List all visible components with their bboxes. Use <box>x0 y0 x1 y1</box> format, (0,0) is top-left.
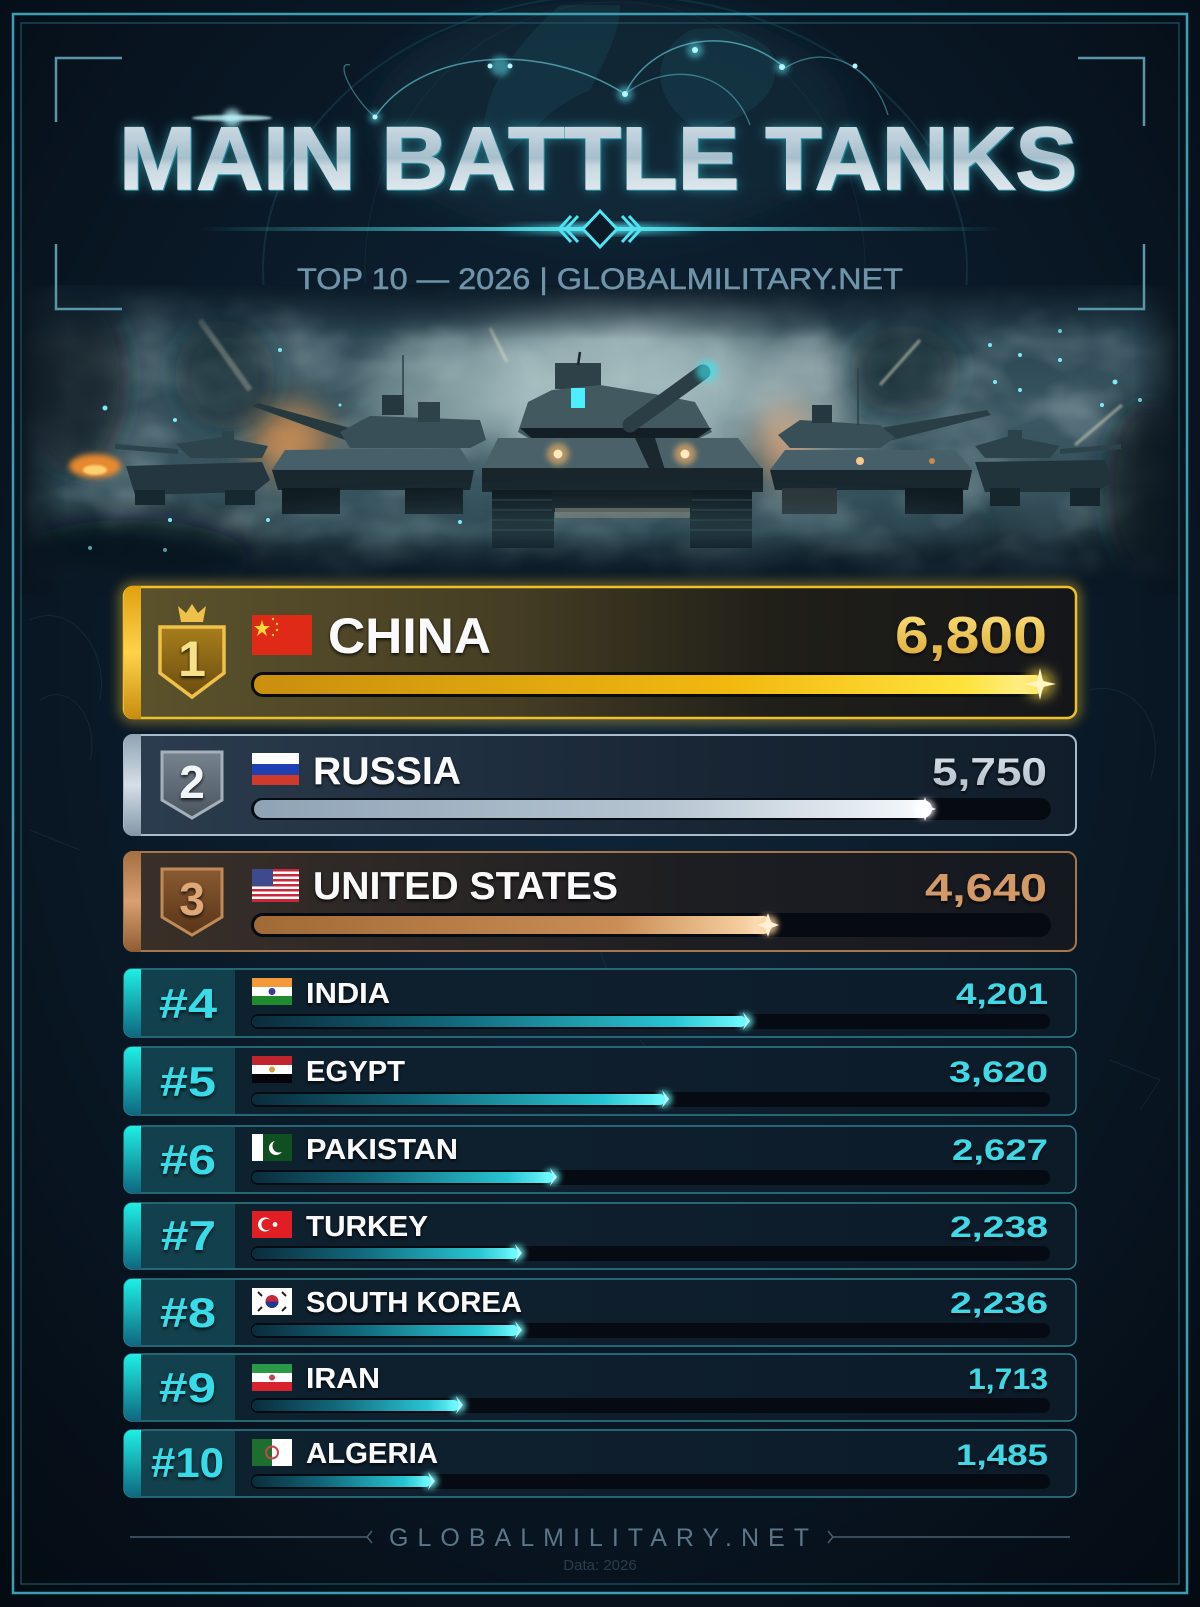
panel: rank 4 India: #4 <box>159 980 218 1027</box>
center tank <box>482 352 763 548</box>
panel: rank 3 United States: 4,640 <box>925 867 1047 910</box>
icon: flag South Korea <box>252 1288 292 1315</box>
panel: rank 1 China <box>124 586 1076 719</box>
icon: flag Russia <box>252 753 299 785</box>
panel: rank 8 South Korea: SOUTH KOREA <box>306 1287 522 1319</box>
footer brand line: GLOBALMILITARY.NET <box>389 1524 809 1552</box>
scene edge fades <box>22 285 1178 595</box>
icon: shield 3: 3 <box>179 873 205 925</box>
icon: shield 3 <box>162 869 222 935</box>
title: MAIN BATTLE TANKS <box>119 108 1077 208</box>
icon: flag Pakistan <box>252 1134 292 1161</box>
faint background map contours <box>30 615 1160 1110</box>
footer brand line <box>130 1524 1070 1552</box>
icon: flag China <box>252 615 312 655</box>
bar chart: United States 4,640 <box>251 913 1051 937</box>
panel: rank 7 Turkey: 2,238 <box>950 1211 1048 1244</box>
title divider with diamond <box>199 211 1002 247</box>
bar chart: Algeria 1,485 <box>251 1472 1050 1490</box>
panel: rank 8 South Korea <box>124 1279 1076 1346</box>
panel: rank 5 Egypt: EGYPT <box>306 1056 405 1088</box>
panel: rank 9 Iran: #9 <box>159 1364 216 1411</box>
corner brackets <box>56 58 1144 309</box>
panel: rank 2 Russia <box>124 734 1076 836</box>
panel: rank 6 Pakistan: 2,627 <box>952 1134 1048 1167</box>
panel: rank 5 Egypt <box>124 1047 1076 1115</box>
icon: flag United States <box>252 869 299 902</box>
panel: rank 7 Turkey <box>124 1203 1076 1269</box>
panel: rank 1 China: 6,800 <box>895 607 1047 665</box>
panel: rank 4 India <box>124 969 1076 1037</box>
bar chart: South Korea 2,236 <box>251 1321 1050 1339</box>
panel: rank 7 Turkey: TURKEY <box>306 1211 428 1243</box>
icon: flag Iran <box>252 1364 292 1391</box>
title: MAIN BATTLE TANKS <box>120 109 1078 209</box>
panel: rank 8 South Korea: 2,236 <box>950 1287 1048 1320</box>
panel: rank 2 Russia: 5,750 <box>932 751 1047 794</box>
far left tank <box>115 431 270 505</box>
panel: rank 4 India: 4,201 <box>956 978 1048 1011</box>
icon: crown and shield 1 <box>160 604 224 697</box>
panel: rank 10 Algeria <box>124 1430 1076 1497</box>
panel: rank 6 Pakistan <box>124 1126 1076 1193</box>
left tank <box>252 355 486 514</box>
bar chart: Russia 5,750 <box>251 797 1051 821</box>
icon: shield 2 <box>162 752 222 818</box>
icon: flag Turkey <box>252 1211 292 1238</box>
panel: rank 9 Iran <box>124 1354 1076 1421</box>
sparks <box>88 329 1142 552</box>
title: MAIN BATTLE TANKS <box>119 108 1077 208</box>
panel: rank 10 Algeria: #10 <box>151 1439 224 1486</box>
footer data note: Data: 2026 <box>563 1557 637 1574</box>
panel: rank 4 India: INDIA <box>306 978 390 1010</box>
panel: rank 1 China: CHINA <box>328 608 491 664</box>
panel: rank 3 United States: UNITED STATES <box>313 865 618 908</box>
icon: crown and shield 1: 1 <box>178 631 206 687</box>
panel: rank 9 Iran: 1,713 <box>968 1363 1048 1396</box>
panel: rank 10 Algeria: 1,485 <box>956 1439 1048 1472</box>
icon: flag India <box>252 978 292 1005</box>
right tank <box>770 368 991 514</box>
ground mist <box>260 508 980 552</box>
panel: rank 2 Russia: RUSSIA <box>313 750 461 793</box>
icon: shield 2: 2 <box>179 756 205 808</box>
bar chart: Turkey 2,238 <box>251 1244 1050 1262</box>
panel: rank 6 Pakistan: PAKISTAN <box>306 1134 458 1166</box>
panel: rank 3 United States <box>124 851 1076 952</box>
battle scene: five tanks in smoke <box>10 285 1195 600</box>
bar chart: Pakistan 2,627 <box>251 1168 1050 1186</box>
bar chart: China 6,800 <box>251 668 1056 700</box>
panel: rank 5 Egypt: 3,620 <box>949 1056 1048 1089</box>
panel: rank 6 Pakistan: #6 <box>160 1136 216 1183</box>
bar chart: India 4,201 <box>251 1012 1050 1030</box>
icon: flag Algeria <box>252 1439 292 1466</box>
panel: rank 9 Iran: IRAN <box>306 1363 380 1395</box>
icon: flag Egypt <box>252 1056 292 1083</box>
globe hologram <box>263 0 967 545</box>
subtitle: TOP 10 — 2026 | GLOBALMILITARY.NET <box>297 263 903 296</box>
panel: rank 8 South Korea: #8 <box>160 1289 216 1336</box>
panel: rank 7 Turkey: #7 <box>161 1212 216 1259</box>
far right tank <box>975 430 1121 506</box>
bar chart: Egypt 3,620 <box>251 1090 1050 1108</box>
panel: rank 5 Egypt: #5 <box>160 1058 216 1105</box>
panel: rank 10 Algeria: ALGERIA <box>306 1438 438 1470</box>
bar chart: Iran 1,713 <box>251 1396 1050 1414</box>
